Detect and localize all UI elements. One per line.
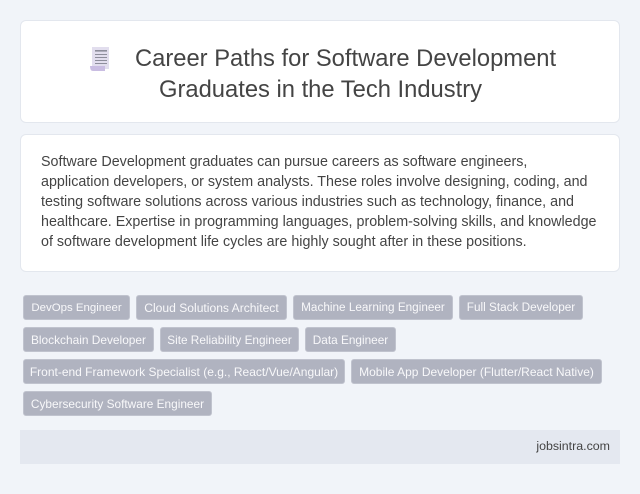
tags (23, 295, 602, 416)
description text: application developers, or system analysts. These roles involve designing, coding, and (41, 174, 588, 190)
tags: Data Engineer (313, 333, 388, 347)
description text: Software Development graduates can pursue careers as software engineers, (41, 154, 527, 170)
panel: title card (20, 20, 620, 123)
description text: testing software solutions across various industries such as technology, finance, and (41, 194, 574, 210)
footer source: jobsintra.com (536, 439, 610, 453)
tags: Machine Learning Engineer (301, 301, 445, 314)
tags: DevOps Engineer (31, 302, 122, 314)
tags: Cybersecurity Software Engineer (31, 397, 204, 411)
footer (20, 430, 620, 464)
title (135, 45, 556, 103)
title: Graduates in the Tech Industry (159, 76, 482, 103)
description text: healthcare. Expertise in programming languages, problem-solving skills, and knowledge (41, 214, 596, 230)
tags: Cloud Solutions Architect (144, 301, 279, 315)
tags: Mobile App Developer (Flutter/React Native) (359, 365, 594, 379)
tags: Full Stack Developer (467, 301, 575, 314)
tags: Front-end Framework Specialist (e.g., React/Vue/Angular) (30, 365, 338, 379)
icon: document (90, 47, 109, 71)
tags: Site Reliability Engineer (167, 333, 292, 347)
panel: description (20, 134, 620, 272)
description text: of software development life cycles are highly sought after in these positions. (41, 234, 527, 250)
description text (41, 154, 596, 250)
tags: Blockchain Developer (31, 333, 146, 347)
title: Career Paths for Software Development (135, 45, 556, 72)
